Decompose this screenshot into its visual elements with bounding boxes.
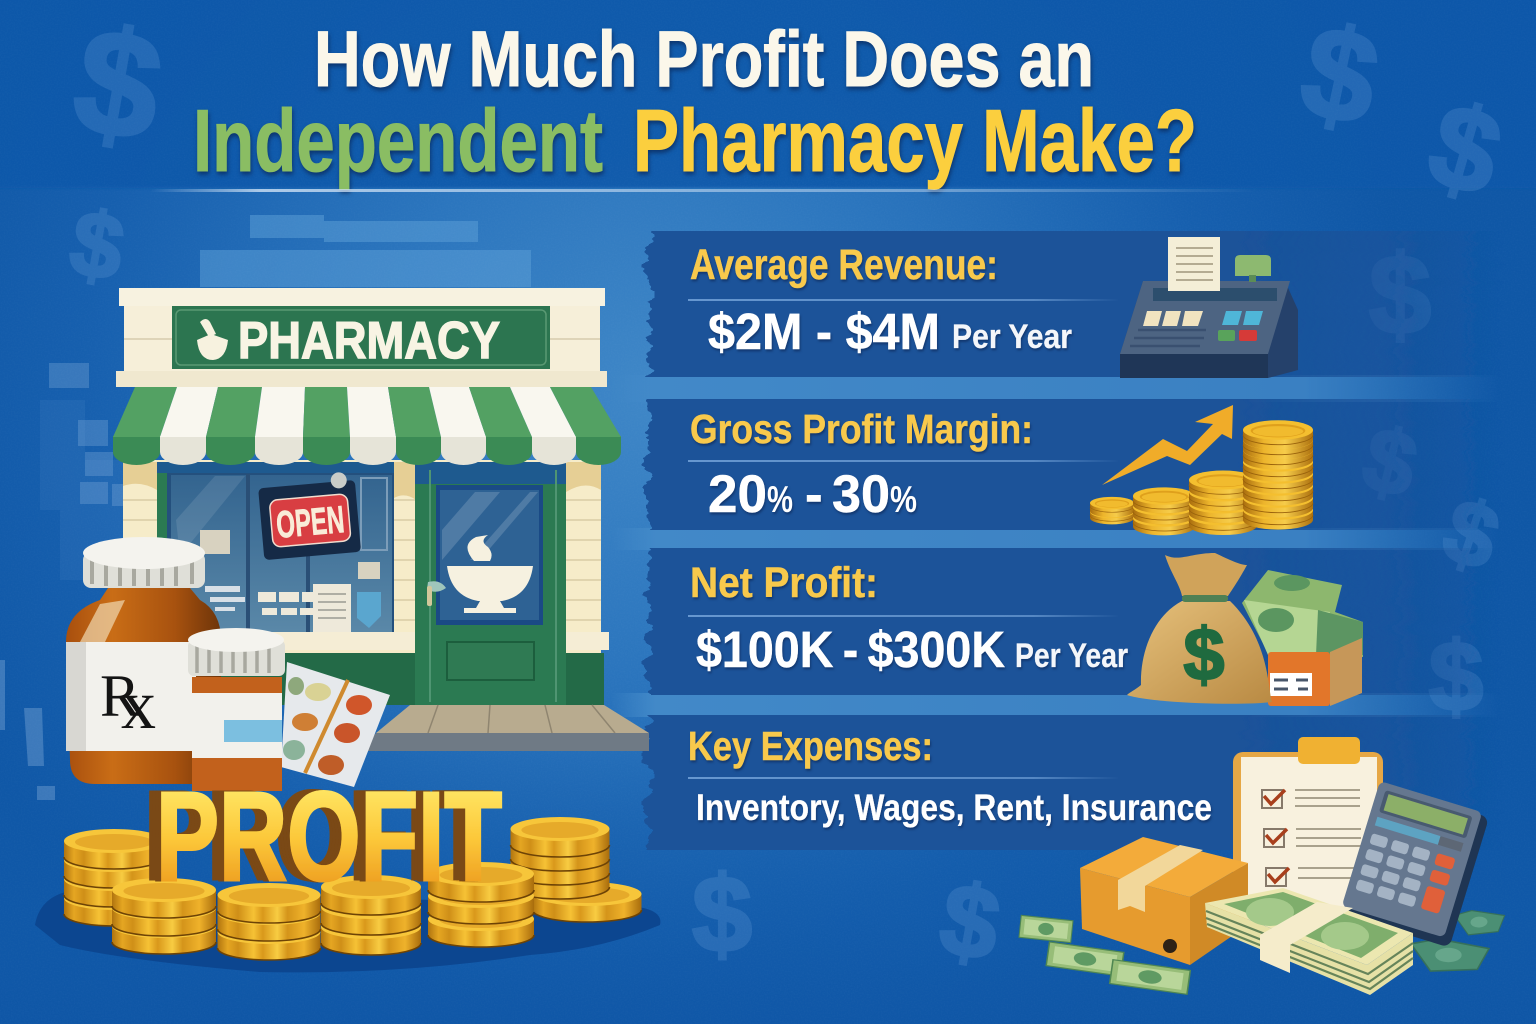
lower facade wall — [123, 460, 609, 705]
rx label: x — [121, 667, 156, 744]
illustration: pharmacy storefront — [113, 288, 649, 751]
heading: average revenue: Average Revenue: — [690, 241, 998, 289]
door handle — [427, 581, 446, 592]
value: margin: % — [767, 479, 793, 520]
unit: per year: Per Year — [952, 318, 1072, 356]
icon: mortar and pestle — [197, 319, 228, 360]
heading: key expenses: Key Expenses: — [688, 723, 933, 769]
unit: per year: Per Year — [1015, 637, 1128, 675]
icon: money bag and cash box — [1127, 553, 1363, 706]
dollar sign: $ — [1183, 613, 1225, 696]
illustration: pill bottles — [66, 537, 390, 791]
calculator — [1339, 781, 1490, 948]
heading: net profit: Net Profit: — [690, 559, 878, 607]
upper facade — [116, 288, 607, 387]
sign: pharmacy — [172, 306, 550, 370]
rx label: R — [100, 663, 140, 729]
decorative dollar signs: $ — [932, 861, 1008, 983]
title line 2: Pharmacy Make? — [633, 91, 1197, 190]
heading: gross profit margin: Gross Profit Margin: — [690, 406, 1033, 452]
info panel backdrop — [610, 231, 1508, 850]
decorative dollar signs: $ — [1415, 78, 1515, 222]
decorative dollar signs: $ — [1429, 621, 1483, 731]
decorative dollar signs: $ — [1289, 0, 1391, 154]
title line 1: How Much Profit Does an — [314, 14, 1094, 103]
panel: key expenses — [688, 723, 1506, 995]
value: net profit: $100K - $300K — [696, 621, 1005, 678]
blister pack — [281, 662, 390, 787]
panel: net profit — [688, 553, 1363, 706]
large bottle — [66, 537, 221, 784]
awning — [113, 387, 621, 465]
sign text: PHARMACY — [238, 312, 500, 370]
value: margin: 20 — [708, 465, 767, 524]
decorative dollar signs: $ — [63, 191, 131, 301]
door — [415, 462, 566, 705]
icon: mortar — [447, 535, 533, 613]
list of expenses: Inventory, Wages, Rent, Insurance — [696, 787, 1212, 828]
shop window — [157, 462, 415, 650]
title — [150, 14, 1260, 192]
value: margin: 30 — [832, 465, 890, 524]
title line 2 — [193, 91, 1197, 190]
panel: gross profit margin — [688, 405, 1313, 535]
decorative dollar signs: $ — [692, 853, 752, 974]
title line 2: Independent — [193, 91, 603, 190]
stack of cash — [1205, 888, 1413, 995]
small bottle — [188, 628, 285, 791]
decorative dollar signs: $ — [1353, 408, 1426, 518]
doorstep — [360, 705, 649, 751]
icon: rising arrow and coins — [1090, 405, 1313, 535]
value: margin: - — [805, 465, 837, 524]
open text: OPEN — [275, 499, 346, 547]
decorative dollar signs: $ — [1432, 480, 1510, 590]
cardboard box — [1080, 837, 1248, 965]
icon: clipboard, calculator, box and cash — [1019, 737, 1506, 995]
panel: average revenue — [688, 237, 1298, 378]
decorative dollar signs: $ — [1369, 232, 1431, 357]
icon: cash register — [1120, 237, 1298, 378]
sign: open — [257, 471, 361, 560]
clipboard — [1233, 737, 1383, 912]
value: revenue: $2M - $4M — [708, 303, 940, 360]
illustration: profit coins — [35, 766, 660, 972]
value: margin: % — [890, 479, 917, 520]
profit wordmark: PROFIT — [156, 766, 502, 907]
